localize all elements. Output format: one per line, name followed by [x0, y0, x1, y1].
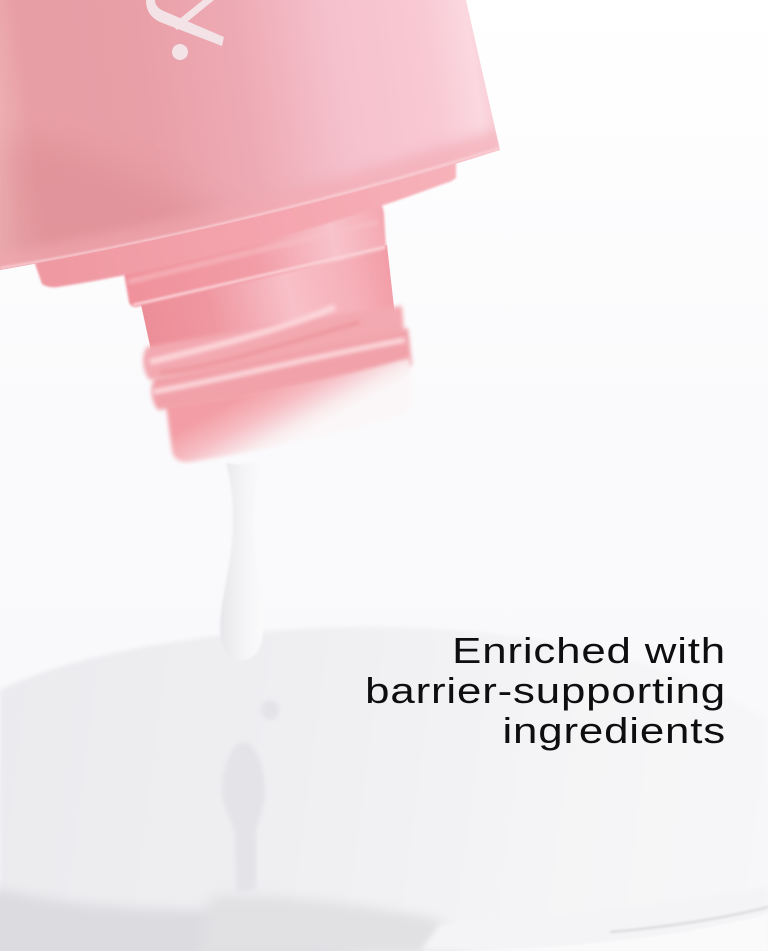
drip reflection — [222, 742, 265, 892]
caption: barrier-supporting — [365, 670, 726, 711]
neck shaft — [140, 245, 396, 355]
tube flange — [33, 150, 456, 287]
cream drip — [220, 458, 265, 660]
caption: ingredients — [502, 710, 726, 751]
tube neck — [123, 200, 412, 462]
thread lower — [152, 328, 412, 410]
cream pool — [0, 627, 768, 951]
thread upper — [143, 306, 404, 380]
tube lettering fragment — [146, 0, 224, 60]
collar — [123, 200, 386, 307]
tube body — [0, 0, 500, 290]
nozzle base with cream — [166, 358, 412, 462]
caption — [365, 630, 726, 751]
caption: Enriched with — [452, 630, 726, 671]
small droplet — [261, 700, 279, 720]
